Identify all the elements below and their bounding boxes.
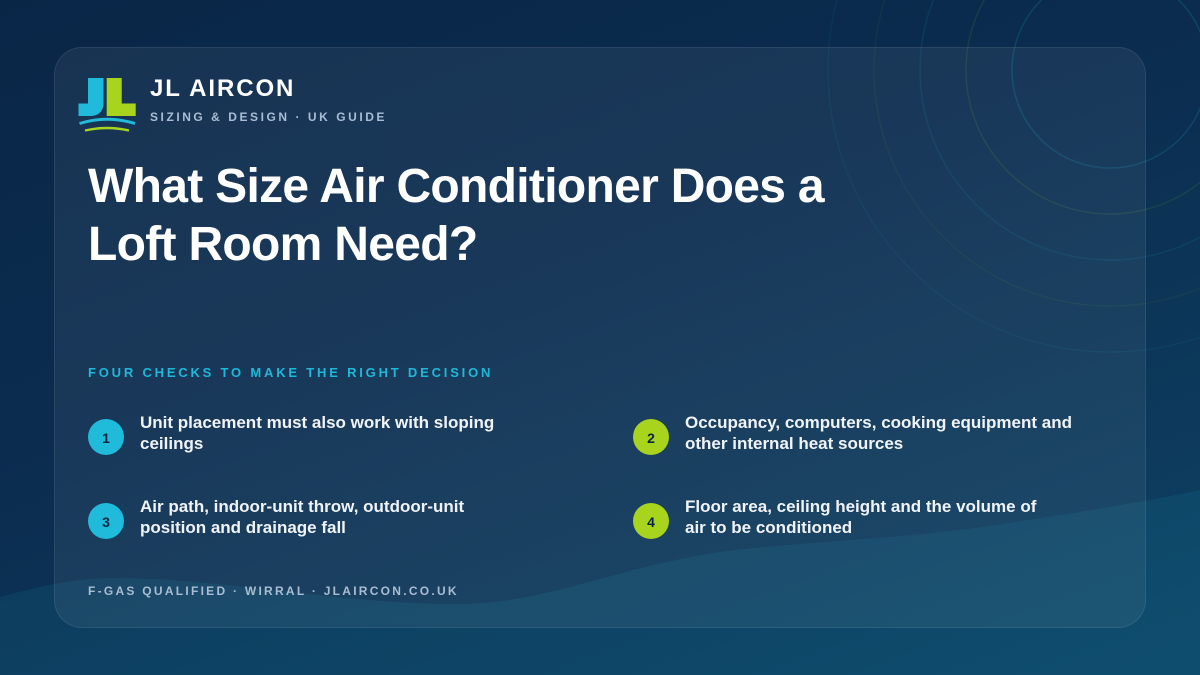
check 3: position and drainage fall bbox=[140, 518, 346, 537]
check 2 bbox=[633, 413, 1072, 455]
check 3: Air path, indoor-unit throw, outdoor-unit bbox=[140, 497, 464, 516]
check 1 bbox=[88, 413, 494, 455]
check 4 bbox=[633, 497, 1036, 539]
panel: main card bbox=[54, 47, 1146, 628]
title: Loft Room Need? bbox=[88, 218, 477, 271]
title: What Size Air Conditioner Does a bbox=[88, 160, 824, 213]
check 1: ceilings bbox=[140, 434, 203, 453]
check 1: 1 bbox=[102, 430, 110, 446]
check 3: 3 bbox=[102, 514, 110, 530]
check 4: Floor area, ceiling height and the volume of bbox=[685, 497, 1036, 516]
check 2: Occupancy, computers, cooking equipment and bbox=[685, 413, 1072, 432]
brand name: JL AIRCON bbox=[150, 75, 295, 102]
check 4: air to be conditioned bbox=[685, 518, 852, 537]
check 2: 2 bbox=[647, 430, 655, 446]
brand subtitle: SIZING & DESIGN · UK GUIDE bbox=[150, 110, 387, 124]
icon: JL Aircon logo bbox=[78, 78, 136, 132]
check 4: 4 bbox=[647, 514, 655, 530]
check 3 bbox=[88, 497, 464, 539]
check 1: Unit placement must also work with sloping bbox=[140, 413, 494, 432]
section heading: FOUR CHECKS TO MAKE THE RIGHT DECISION bbox=[88, 365, 493, 380]
footer line: F-GAS QUALIFIED · WIRRAL · JLAIRCON.CO.UK bbox=[88, 584, 459, 598]
title bbox=[88, 160, 825, 271]
check 2: other internal heat sources bbox=[685, 434, 903, 453]
